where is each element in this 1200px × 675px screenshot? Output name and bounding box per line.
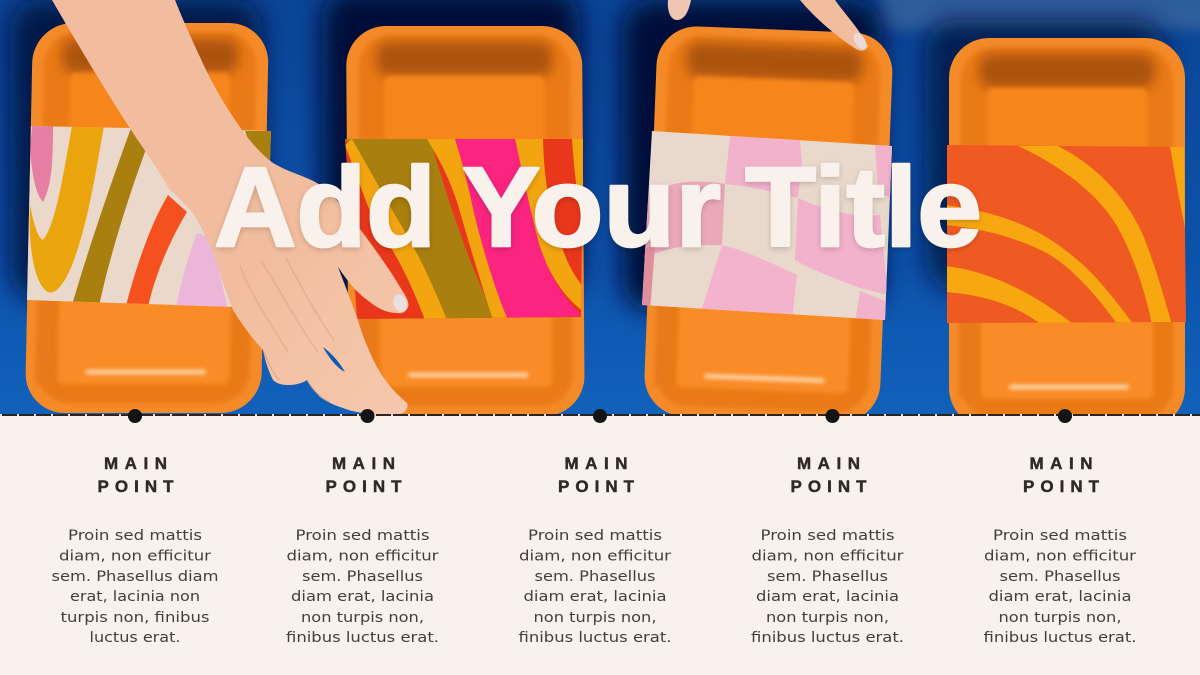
heading 4: POINT xyxy=(790,477,867,496)
heading 5: MAIN xyxy=(1030,454,1092,473)
heading 2: POINT xyxy=(326,477,402,496)
title: Add xyxy=(214,144,436,270)
heading 5: POINT xyxy=(1023,477,1100,496)
heading 3 xyxy=(558,454,635,496)
body text 4: diam erat, lacinia xyxy=(756,589,899,605)
body text 2 xyxy=(286,528,439,646)
hand: fingertips at top xyxy=(668,0,869,51)
heading 3: POINT xyxy=(558,477,635,496)
body text 5: Proin sed mattis xyxy=(993,528,1127,544)
body text 2: diam, non efficitur xyxy=(286,548,439,564)
photo background xyxy=(0,0,1200,428)
body text 2: finibus luctus erat. xyxy=(286,630,439,646)
body text 1: sem. Phasellus diam xyxy=(52,569,218,585)
fingernail xyxy=(393,294,407,312)
body text 2: non turpis non, xyxy=(301,610,424,626)
body text 3: non turpis non, xyxy=(534,610,656,626)
heading 3: MAIN xyxy=(564,454,628,473)
body text 1: Proin sed mattis xyxy=(68,528,202,544)
column 2 xyxy=(286,454,439,646)
band 2 xyxy=(340,135,590,325)
band 3 xyxy=(642,131,892,320)
timeline xyxy=(0,409,1200,423)
body text 3 xyxy=(518,528,672,646)
gap between fingers xyxy=(323,347,345,372)
column 4 xyxy=(751,454,904,646)
heading 4: MAIN xyxy=(797,454,860,473)
hand: reaching arm xyxy=(52,0,409,414)
column 1 xyxy=(52,454,218,646)
body text 1: diam, non efficitur xyxy=(59,548,211,564)
body text 3: finibus luctus erat. xyxy=(518,630,672,646)
heading 2: MAIN xyxy=(332,454,395,473)
tray 2 xyxy=(340,26,590,416)
body text 5: diam erat, lacinia xyxy=(988,589,1132,605)
body text 3: diam erat, lacinia xyxy=(524,589,666,605)
body text 2: diam erat, lacinia xyxy=(291,589,434,605)
body text 4: Proin sed mattis xyxy=(760,528,894,544)
body text 5: finibus luctus erat. xyxy=(984,630,1136,646)
tray 3 xyxy=(635,25,900,424)
body text 4: non turpis non, xyxy=(766,610,889,626)
column 5 xyxy=(984,454,1136,646)
body text 5: diam, non efficitur xyxy=(984,548,1136,564)
tray 1 xyxy=(20,23,280,413)
body text 2: sem. Phasellus xyxy=(302,569,423,585)
body text 1 xyxy=(52,528,218,646)
body text 4: finibus luctus erat. xyxy=(751,630,904,646)
body text 4: sem. Phasellus xyxy=(767,569,888,585)
body text 3: sem. Phasellus xyxy=(534,569,656,585)
body text 1: erat, lacinia non xyxy=(70,589,200,605)
heading 5 xyxy=(1023,454,1100,496)
body text 3: Proin sed mattis xyxy=(528,528,662,544)
heading 1 xyxy=(98,454,174,496)
heading 2 xyxy=(326,454,402,496)
body text 5: sem. Phasellus xyxy=(1000,569,1120,585)
column 3 xyxy=(518,454,672,646)
heading 1: MAIN xyxy=(104,454,167,473)
body text 4 xyxy=(751,528,904,646)
body text 1: turpis non, finibus xyxy=(60,610,210,626)
body text 5 xyxy=(984,528,1136,646)
tray 4 xyxy=(940,38,1190,428)
body text 2: Proin sed mattis xyxy=(296,528,430,544)
heading 4 xyxy=(790,454,867,496)
title xyxy=(214,144,982,270)
body text 5: non turpis non, xyxy=(998,610,1122,626)
bottom panel background xyxy=(0,415,1200,675)
title: Title xyxy=(745,144,982,270)
title: Your xyxy=(462,144,721,270)
tray shadows xyxy=(10,0,1165,310)
band 4 xyxy=(947,145,1186,323)
band 1 xyxy=(27,126,271,307)
body text 3: diam, non efficitur xyxy=(519,548,671,564)
body text 4: diam, non efficitur xyxy=(752,548,904,564)
heading 1: POINT xyxy=(98,477,174,496)
body text 1: luctus erat. xyxy=(90,630,180,646)
